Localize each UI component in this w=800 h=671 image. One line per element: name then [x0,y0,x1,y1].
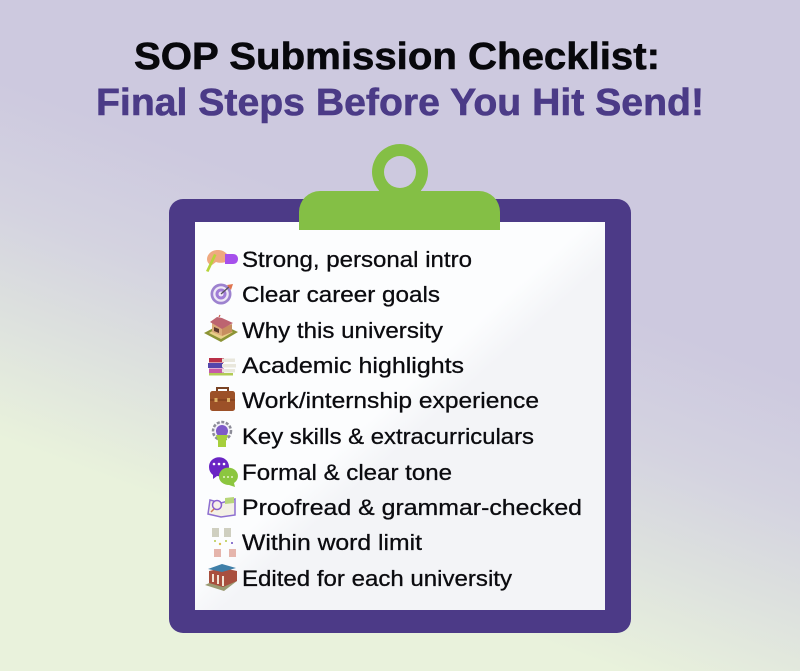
item 8: proofread [208,495,582,520]
label: Within word limit [242,530,423,555]
label: Proofread & grammar-checked [242,495,582,520]
label: Formal & clear tone [242,460,452,485]
title line 1: SOP Submission Checklist: [134,36,660,78]
item 2: career goals [210,282,440,307]
icon: light bulb with gear [213,422,231,447]
label: Key skills & extracurriculars [242,424,534,449]
label: Edited for each university [242,566,513,591]
clipboard [169,144,631,633]
icon: open book with magnifier [208,497,235,517]
icon: target [210,284,233,304]
clip [299,144,500,230]
item 6: key skills [213,422,534,449]
item 1: strong intro [206,247,472,272]
label: Clear career goals [242,282,440,307]
checklist [204,247,582,591]
item 10: edited for university [205,564,513,591]
label: Academic highlights [242,353,464,378]
icon: university with graduation cap [205,564,237,591]
icon: briefcase [210,388,235,411]
item 3: university [204,315,444,343]
item 7: tone [209,457,452,487]
paper sheet [195,222,605,610]
label: Why this university [242,318,444,343]
title [96,36,704,124]
icon: word cards diagram [212,528,236,557]
label: Strong, personal intro [242,247,472,272]
icon: campus building [204,315,238,342]
icon: hand with pencil [206,250,238,272]
title line 2: Final Steps Before You Hit Send! [96,82,704,124]
item 5: work experience [210,388,539,413]
item 4: academic highlights [208,353,464,378]
clipboard board [169,199,631,633]
icon: stack of books [208,358,236,376]
item 9: word limit [212,528,423,557]
label: Work/internship experience [242,388,539,413]
icon: speech bubbles [209,457,238,487]
